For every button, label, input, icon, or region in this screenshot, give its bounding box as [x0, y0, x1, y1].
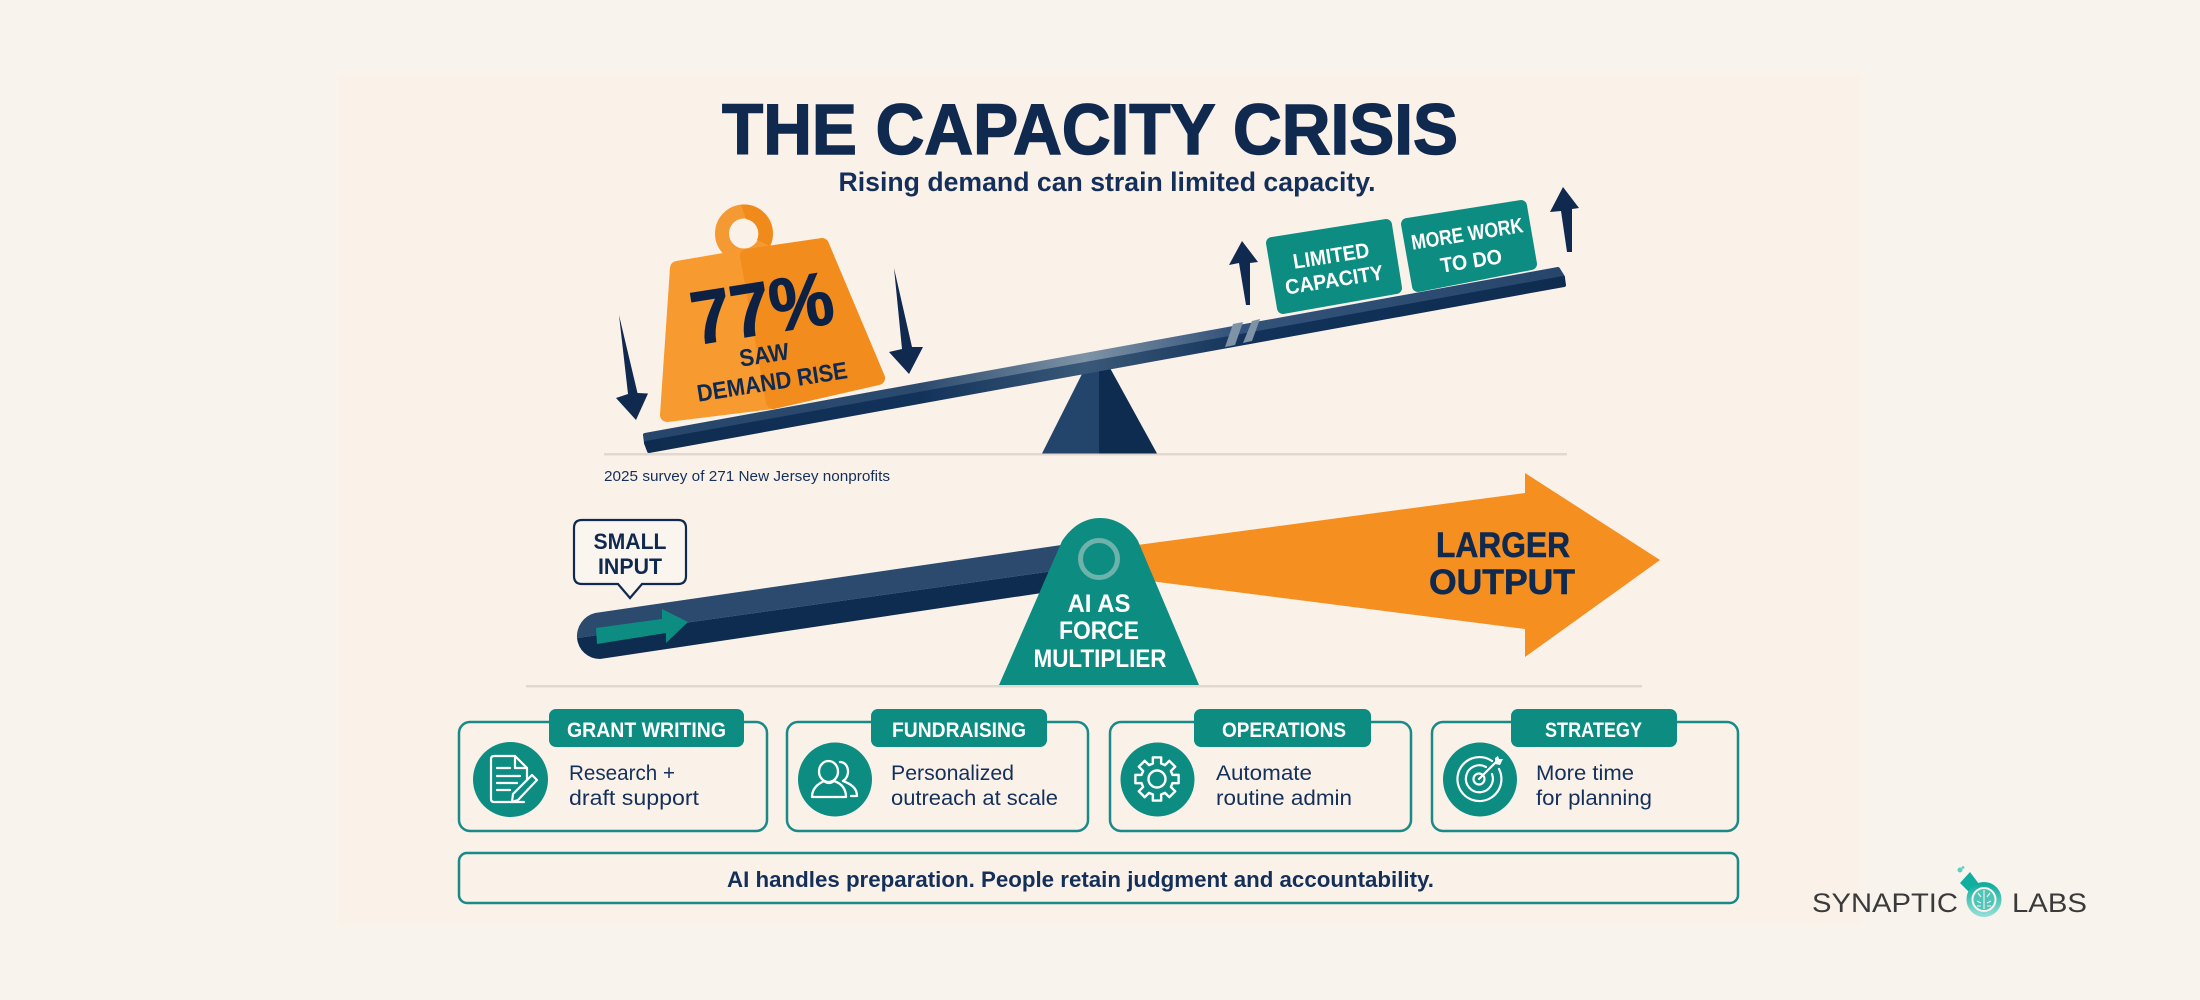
icon: target: [1443, 742, 1517, 816]
source note: 2025 survey of 271 New Jersey nonprofits: [604, 468, 890, 485]
tag: [871, 709, 1047, 747]
logo: Synaptic Labs: LABS: [2012, 888, 2087, 918]
weight: 77% saw demand rise: [667, 204, 878, 415]
text: Research +: [569, 761, 675, 785]
takeaway bar: AI handles preparation. People retain judgment and accountability.: [727, 867, 1434, 892]
tag: STRATEGY: [1545, 719, 1642, 742]
arrow: down left: [616, 315, 648, 420]
text: [1216, 761, 1352, 810]
tag: [1194, 709, 1371, 747]
ground line: [526, 685, 1642, 688]
tag: GRANT WRITING: [567, 719, 726, 742]
icon: document and pencil: [473, 742, 548, 817]
stat 77%: 77%: [685, 255, 839, 361]
fulcrum: AI as force multiplier: MULTIPLIER: [1034, 645, 1166, 673]
box: more work to do: MORE WORK: [1410, 214, 1525, 255]
text: outreach at scale: [891, 786, 1058, 810]
box: limited capacity: [1272, 225, 1396, 308]
fulcrum: AI as force multiplier: AI AS: [1068, 590, 1130, 618]
tag: [549, 709, 744, 747]
fulcrum: AI as force multiplier: FORCE: [1059, 617, 1139, 645]
orange output arrow: [1130, 473, 1660, 657]
card: operations: [1110, 709, 1411, 831]
card: fundraising: [787, 709, 1088, 831]
logo: Synaptic Labs: SYNAPTIC: [1812, 888, 1958, 918]
text: [1536, 761, 1652, 810]
fulcrum: [1042, 368, 1157, 454]
text: More time: [1536, 761, 1634, 785]
title: THE CAPACITY CRISIS: [722, 91, 1458, 170]
text: [569, 761, 699, 810]
card: grant writing: [459, 709, 767, 831]
text: Automate: [1216, 761, 1312, 785]
text: Personalized: [891, 761, 1014, 785]
ground line: [604, 453, 1567, 456]
text: routine admin: [1216, 786, 1352, 810]
tag: OPERATIONS: [1222, 719, 1346, 742]
icon: people: [798, 742, 872, 816]
label: larger output: OUTPUT: [1429, 563, 1575, 602]
speech bubble: small input: SMALL: [594, 529, 666, 554]
takeaway bar: [459, 853, 1738, 903]
text: [891, 761, 1058, 810]
seesaw: capacity imbalance: [604, 187, 1579, 456]
label saw: SAW: [737, 338, 791, 373]
speech bubble: small input: INPUT: [598, 554, 663, 579]
lever bar: [577, 543, 1075, 659]
icon: flask with brain: [1958, 866, 1999, 914]
fulcrum: AI as force multiplier: [999, 518, 1199, 685]
text: draft support: [569, 786, 699, 810]
tag: [1511, 709, 1677, 747]
subtitle: Rising demand can strain limited capacity.: [838, 167, 1376, 197]
box: more work to do: [1407, 206, 1531, 286]
tilted beam: [645, 269, 1564, 451]
text: for planning: [1536, 786, 1652, 810]
arrow: down right: [889, 268, 923, 374]
arrow: up left: [1229, 241, 1258, 305]
card: strategy: [1432, 709, 1738, 831]
label demand rise: DEMAND RISE: [695, 357, 849, 408]
label: larger output: [1429, 526, 1575, 602]
box: more work to do: TO DO: [1439, 245, 1504, 278]
lever: AI as force multiplier: [526, 473, 1660, 688]
logo: Synaptic Labs: [1812, 866, 2087, 918]
background panel: [338, 74, 1861, 925]
box: limited capacity: CAPACITY: [1284, 261, 1385, 300]
icon: gear: [1120, 742, 1194, 816]
small teal input arrow: [596, 609, 688, 644]
speech bubble: small input: [574, 520, 686, 598]
box: limited capacity: LIMITED: [1291, 239, 1371, 274]
tag: FUNDRAISING: [892, 719, 1026, 742]
label: larger output: LARGER: [1436, 526, 1570, 565]
arrow: up right: [1550, 187, 1579, 252]
